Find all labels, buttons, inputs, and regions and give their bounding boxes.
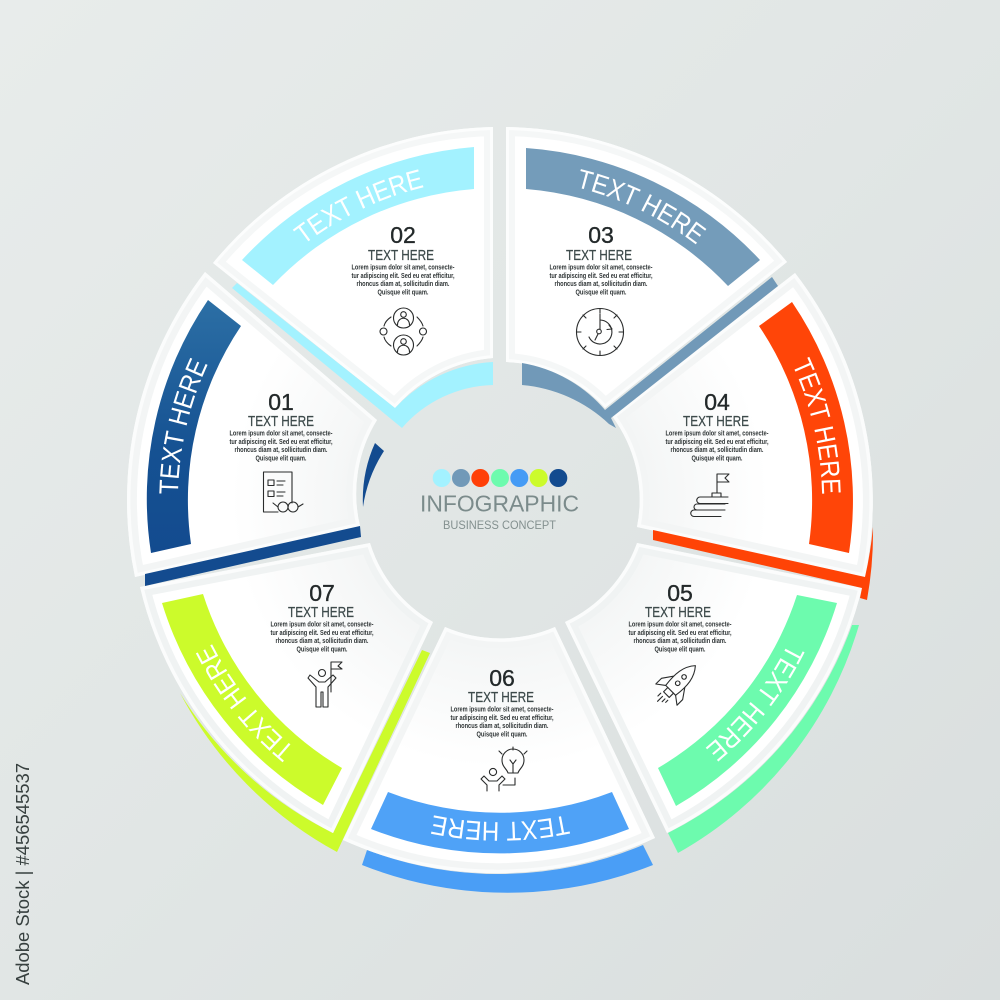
text block: segment 04: tur adipiscing elit. Sed eu erat efficitur, xyxy=(666,437,768,446)
icon: person and light bulb xyxy=(481,747,527,791)
text block: segment 07: TEXT HERE xyxy=(288,604,354,621)
text block: segment 06: TEXT HERE xyxy=(468,689,534,706)
text block: segment 04: 04 xyxy=(704,389,730,415)
band: segment 03 xyxy=(526,148,760,286)
text block: segment 04: rhoncus diam at, sollicitudin diam. xyxy=(670,445,764,454)
text block: segment 06: 06 xyxy=(489,665,515,691)
icon: two people exchange xyxy=(380,308,426,355)
card: segment 01 xyxy=(127,272,377,577)
accent: segment 03 strip xyxy=(522,277,778,428)
text block: segment 02: rhoncus diam at, sollicitudin diam. xyxy=(356,279,450,288)
text block: segment 01: rhoncus diam at, sollicitudin diam. xyxy=(234,445,328,454)
subtitle: BUSINESS CONCEPT xyxy=(443,518,557,532)
band label: segment 02: TEXT HERE xyxy=(292,169,424,242)
text block: segment 06: Lorem ipsum dolor sit amet, consecte- xyxy=(450,704,554,714)
accent: segment 01 bottom strip xyxy=(145,526,361,586)
band label: segment 05: TEXT HERE xyxy=(706,648,804,762)
text block: segment 03 xyxy=(550,222,653,296)
text block: segment 05: Quisque elit quam. xyxy=(654,644,706,653)
band label: segment 06: TEXT HERE xyxy=(431,815,570,841)
text block: segment 07: Lorem ipsum dolor sit amet, consecte- xyxy=(270,620,374,628)
text block: segment 03: rhoncus diam at, sollicitudin diam. xyxy=(554,279,648,288)
band: segment 01 xyxy=(147,300,241,553)
text block: segment 01: Lorem ipsum dolor sit amet, consecte- xyxy=(230,428,333,438)
text block: segment 05: tur adipiscing elit. Sed eu erat efficitur, xyxy=(628,628,732,637)
text block: segment 03: Quisque elit quam. xyxy=(576,287,626,296)
text block: segment 01 xyxy=(230,389,333,462)
band: segment 06 xyxy=(371,792,629,853)
accent: segment 01 inner arc xyxy=(363,443,384,507)
panel: segment 03 xyxy=(506,127,787,428)
text block: segment 03: TEXT HERE xyxy=(566,247,632,264)
accent: segment 04 strip xyxy=(653,527,873,600)
text block: segment 05: TEXT HERE xyxy=(645,604,711,621)
band label: segment 07: TEXT HERE xyxy=(196,644,290,762)
text block: segment 02: Quisque elit quam. xyxy=(378,287,428,296)
text block: segment 02: tur adipiscing elit. Sed eu erat efficitur, xyxy=(352,271,454,280)
card: segment 05 xyxy=(565,543,862,833)
text block: segment 04 xyxy=(666,389,769,462)
accent: segment 02 strip xyxy=(232,283,493,428)
panel: segment 06 xyxy=(343,627,655,893)
panel: segment 04 xyxy=(612,273,874,600)
icon: person with flag xyxy=(308,662,342,707)
panel: segment 02 xyxy=(213,127,493,428)
accent: segment 06 bottom strip xyxy=(362,845,653,893)
band: segment 07 xyxy=(162,594,342,805)
accent: segment 05 outer strip xyxy=(668,625,859,853)
text block: segment 04: Lorem ipsum dolor sit amet, consecte- xyxy=(666,428,769,438)
text block: segment 01: 01 xyxy=(268,389,294,415)
panel: segment 07 xyxy=(140,543,433,852)
text block: segment 06: tur adipiscing elit. Sed eu erat efficitur, xyxy=(450,713,554,722)
text block: segment 05: Lorem ipsum dolor sit amet, consecte- xyxy=(628,620,732,628)
text block: segment 05: 05 xyxy=(667,580,693,606)
title: INFOGRAPHIC xyxy=(420,491,579,517)
card: segment 02 xyxy=(213,127,493,408)
icon: document and glasses xyxy=(264,472,303,512)
text block: segment 06: rhoncus diam at, sollicitudin diam. xyxy=(456,721,548,730)
text block: segment 01: tur adipiscing elit. Sed eu erat efficitur, xyxy=(230,437,332,446)
text block: segment 03: Lorem ipsum dolor sit amet, consecte- xyxy=(550,262,653,272)
text block: segment 06 xyxy=(450,665,554,738)
text block: segment 05 xyxy=(628,580,732,653)
text block: segment 07: 07 xyxy=(309,580,335,606)
text block: segment 07 xyxy=(270,580,374,653)
band label: segment 03: TEXT HERE xyxy=(580,169,706,244)
text block: segment 02: 02 xyxy=(390,222,416,248)
band: segment 04 xyxy=(759,302,853,553)
panel: segment 01 xyxy=(127,272,384,586)
text block: segment 01: Quisque elit quam. xyxy=(256,453,306,462)
card: segment 03 xyxy=(506,127,787,408)
text block: segment 04: Quisque elit quam. xyxy=(692,453,742,462)
text block: segment 02: Lorem ipsum dolor sit amet, consecte- xyxy=(352,262,455,272)
text block: segment 04: TEXT HERE xyxy=(683,413,749,430)
side credit text: Adobe Stock | #456545537 xyxy=(13,763,33,985)
icon: rocket xyxy=(648,655,706,713)
icon: gauge xyxy=(576,308,624,356)
band label: segment 01: TEXT HERE xyxy=(159,358,208,494)
text block: segment 07: rhoncus diam at, sollicitudin diam. xyxy=(276,636,368,645)
accent: segment 07 side strip xyxy=(180,650,430,852)
card: segment 06 xyxy=(343,627,655,873)
text block: segment 03: tur adipiscing elit. Sed eu erat efficitur, xyxy=(550,271,652,280)
text block: segment 01: TEXT HERE xyxy=(248,413,314,430)
band: segment 05 xyxy=(658,595,837,806)
card: segment 07 xyxy=(140,543,433,833)
text block: segment 05: rhoncus diam at, sollicitudin diam. xyxy=(634,636,726,645)
center title block xyxy=(420,469,579,532)
text block: segment 02: TEXT HERE xyxy=(368,247,434,264)
band label: segment 04: TEXT HERE xyxy=(794,356,841,494)
card: segment 04 xyxy=(612,273,873,577)
band: segment 02 xyxy=(242,147,474,285)
legend dots xyxy=(433,469,567,487)
text block: segment 07: Quisque elit quam. xyxy=(296,644,348,653)
text block: segment 03: 03 xyxy=(588,222,614,248)
text block: segment 06: Quisque elit quam. xyxy=(476,729,528,738)
panel: segment 05 xyxy=(565,543,862,853)
text block: segment 07: tur adipiscing elit. Sed eu erat efficitur, xyxy=(270,628,374,637)
text block: segment 02 xyxy=(352,222,455,296)
icon: flag on books xyxy=(691,474,729,516)
